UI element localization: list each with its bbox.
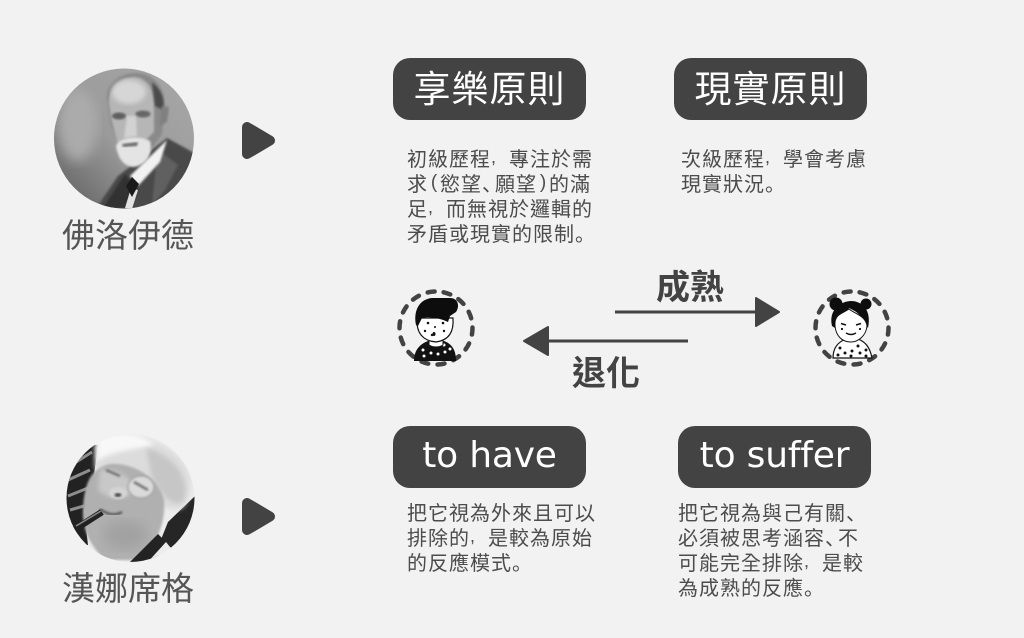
text: to suffer description: 把它視為與己有關 [678, 497, 846, 526]
text: to suffer description: 。 [804, 572, 824, 601]
heading: to have: to have [422, 435, 557, 476]
text: to have description: 排除的 是較為原始 [407, 522, 593, 551]
icon: arrow to have and suffer [247, 503, 270, 530]
icon: mature girl in dashed circle [809, 285, 895, 371]
text: reality principle description: , [765, 147, 770, 167]
text: pleasure principle description: 求 慾望 願望 的滿 [407, 168, 591, 197]
heading: pleasure principle: 享樂原則 [414, 59, 566, 113]
text: pleasure principle description [407, 143, 595, 247]
text: reality principle description: 現實狀況 [681, 168, 765, 197]
text: pleasure principle description: 。 [575, 218, 595, 247]
name: Freud: 佛洛伊德 [62, 209, 194, 257]
heading: to suffer [678, 426, 871, 488]
label: maturation: 成熟 [656, 260, 724, 309]
portrait: Hanna Segal [66, 433, 196, 566]
text: to have description: 的反應模式 [407, 547, 512, 576]
heading: to have [393, 426, 586, 488]
text: pleasure principle description: ( [431, 172, 437, 193]
text: pleasure principle description: , [428, 197, 433, 217]
arrow: regression [524, 327, 688, 355]
text: to suffer description [678, 497, 866, 601]
heading: to suffer: to suffer [700, 435, 849, 476]
text: pleasure principle description: 矛盾或現實的限制 [407, 218, 575, 247]
arrow: maturation [615, 298, 779, 326]
text: reality principle description: 次級歷程 學會考慮 [681, 143, 867, 172]
text: to have description [407, 497, 596, 576]
text: reality principle description: 。 [765, 168, 785, 197]
icon: young boy in dashed circle [393, 285, 479, 371]
text: to suffer description: 為成熟的反應 [678, 572, 804, 601]
text: pleasure principle description: 足 而無視於邏輯的 [407, 193, 593, 222]
heading: pleasure principle [393, 58, 586, 120]
portrait: Freud [54, 68, 198, 212]
text: pleasure principle description: 、 [482, 168, 502, 197]
text: to have description: 把它視為外來且可以 [407, 497, 596, 526]
text: pleasure principle description: ) [540, 172, 546, 193]
text: to suffer description: , [804, 551, 809, 571]
text: pleasure principle description: 初級歷程 專注於需 [407, 143, 593, 172]
name: Hanna Segal: 漢娜席格 [62, 562, 194, 610]
heading: reality principle: 現實原則 [694, 59, 846, 113]
text: to suffer description: 、 [825, 522, 845, 551]
text: reality principle description [681, 143, 867, 197]
text: to have description: , [470, 526, 475, 546]
heading: reality principle [674, 58, 867, 120]
icon: arrow to pleasure and reality principles [247, 127, 270, 154]
text: to have description: 。 [512, 547, 532, 576]
text: pleasure principle description: , [491, 147, 496, 167]
text: to suffer description: 、 [846, 497, 866, 526]
text: to suffer description: 必須被思考涵容 不 [678, 522, 859, 551]
text: to suffer description: 可能完全排除 是較 [678, 547, 864, 576]
label: regression: 退化 [572, 346, 640, 395]
